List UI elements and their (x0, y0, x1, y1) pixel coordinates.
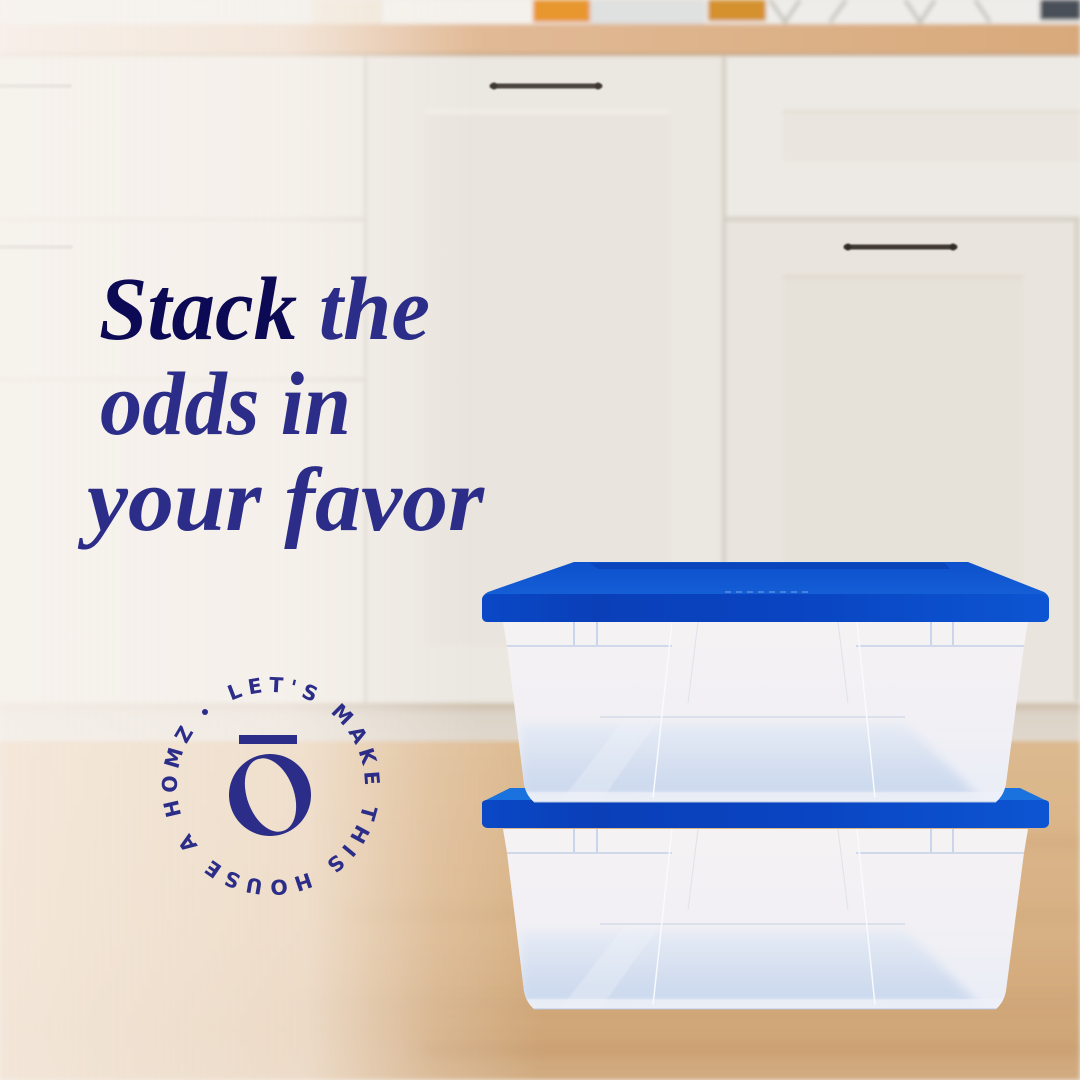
countertop (0, 24, 1080, 55)
backsplash and counter items (0, 0, 1080, 26)
door gaps (0, 57, 1080, 703)
badge circular text: LET'S MAKE THIS HOUSE A HOMZ (162, 676, 380, 895)
top bin lid (482, 562, 1049, 622)
wood floor (0, 741, 1080, 1080)
logo: o with macron (229, 735, 311, 836)
title line 2: odds in (100, 355, 351, 454)
storage bins stack (482, 562, 1049, 1011)
floor planks (300, 840, 1080, 1056)
cabinet handles (0, 82, 956, 250)
cabinet doors (367, 57, 1080, 703)
top bin body (503, 622, 1028, 804)
bottom bin (482, 788, 1049, 1011)
left white fade (0, 0, 480, 741)
bottom bin body (503, 829, 1028, 1011)
bottom bin lid (482, 788, 1049, 828)
bottom bin lid front (482, 800, 1049, 828)
badge: let's make this house a homz (162, 676, 380, 895)
kickboard (0, 703, 1080, 741)
title line 3: your favor (77, 451, 485, 550)
title line 1: Stack the (99, 260, 430, 359)
title (77, 260, 485, 550)
top bin (482, 562, 1049, 804)
